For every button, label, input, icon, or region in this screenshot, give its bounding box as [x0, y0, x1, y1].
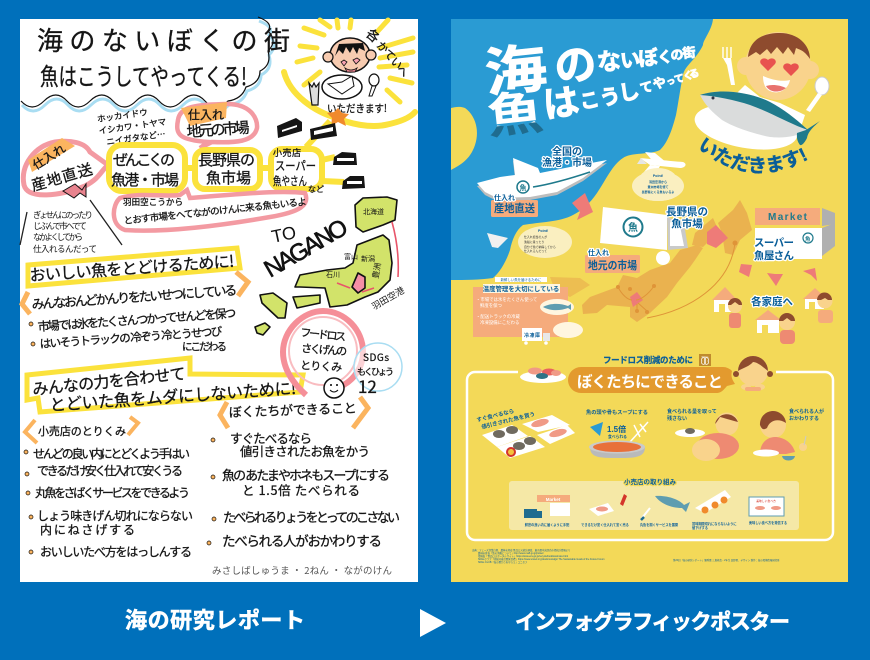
item: fresh delivery: 鮮度の良い内に届くように手配	[525, 522, 570, 527]
panel: retailer initiatives	[509, 477, 799, 530]
caption: ocean research report: 海の研究レポート	[125, 608, 305, 633]
arrow	[420, 609, 446, 637]
footer: sources: 出典：フェーズ漁業白書、農林水産省 食品ロス統計調査、東京都中央卸売市場統計情報より	[472, 548, 571, 552]
tag: local market: 仕入れ	[588, 248, 609, 257]
house 1	[712, 287, 737, 312]
text: to each home: い	[387, 54, 406, 73]
column: take only what you can eat: 食べられる量を取って	[667, 408, 717, 415]
icon: sdg 12: SDGs	[702, 355, 709, 359]
circle: food loss initiative: とりくみ	[300, 357, 343, 375]
list: what we can do: 値引きされたお魚をかう	[240, 441, 370, 460]
yellow box: fishing ports and markets	[109, 145, 195, 191]
footer: sources	[472, 548, 780, 564]
list: what we can do: たべられるりょうをとってのこさない	[223, 507, 400, 526]
footer: sources: 第20回「海の研究レポート」優秀賞 三島柊真・2年生 長野県、デザイン 制作：海の環境情報研究所	[673, 558, 780, 562]
item: discount stickers: 賞味期限切れにならないように	[692, 521, 737, 526]
panel: infographic poster	[451, 19, 848, 582]
icon: star	[327, 108, 349, 126]
title: poster: て	[673, 73, 685, 86]
footer: sources: SDGsクラブ「持続可能な開発目標」https://www.unicef.or.jp/kodomo/sdgs/ The Sustainable Goals of the Future Forum	[478, 557, 604, 561]
note: on fishing boats: なかよくしてから	[33, 231, 83, 243]
yellow box: retailers	[271, 121, 344, 195]
tag: local market	[585, 248, 640, 273]
note: prefectures: イシカワ・トヤマ	[98, 116, 167, 137]
tag: direct from origin	[491, 193, 538, 217]
note: lines	[20, 200, 122, 245]
column: take only what you can eat: 残さない	[667, 415, 687, 422]
label: each household: 各家庭へ	[751, 295, 793, 308]
note: prefectures	[96, 104, 169, 149]
bubble: point sea: Point!	[538, 229, 548, 233]
footer: sources: 農林水産省「魚の消費について」http://www.maff.go.jp/j/tokei/	[478, 551, 544, 555]
footer: sources: SDGs CLUB「海の豊かさを守ろう」ユニセフ	[478, 560, 528, 564]
map: japan sketch: 豊洲	[370, 262, 384, 280]
title: poster: ぼ	[637, 46, 659, 71]
note: prefectures: ニイガタなど…	[106, 128, 166, 148]
title: handwritten: 海のないぼくの街	[37, 21, 290, 58]
item: recipes: 美味しい食べ方を発信する	[749, 520, 787, 525]
label: nagano market: 長野県の	[666, 205, 708, 218]
title: poster: く	[682, 69, 694, 83]
icon: boy with fish plate	[691, 32, 829, 157]
list: what we can do: と 1.5倍 たべられる	[242, 480, 360, 499]
label: nationwide ports: 漁港・市場	[542, 156, 592, 169]
note: on fishing boats	[33, 209, 97, 255]
map: japan sketch: 富山	[344, 252, 358, 262]
text: to each home: へ	[393, 62, 412, 81]
note: prefectures: ホッカイドウ	[96, 106, 149, 125]
text: itadakimasu: いただきます!	[700, 137, 808, 174]
pink bubble: direct from origin: 産地直送	[29, 158, 95, 196]
icon: fish market building	[600, 207, 688, 265]
title: poster: て	[639, 79, 654, 96]
icon: supermarket	[755, 208, 835, 259]
title: poster: る	[688, 67, 700, 81]
bubble: point: 豊洲市場を経て	[647, 184, 669, 189]
heading: retailers: 小売店のとりくみ	[38, 423, 126, 439]
bubble: point sea	[518, 226, 572, 258]
yellow box: nagano fish market: 長野県の	[198, 149, 255, 170]
panel: temperature control: 冷凍設備にこだわる	[480, 319, 519, 326]
title: handwritten	[37, 21, 290, 92]
map: japan sketch: 新潟	[361, 254, 375, 264]
icon: freezer truck	[522, 328, 550, 345]
yellow box: nagano fish market	[195, 149, 272, 189]
item: recipes: 美味しい食べ方	[756, 499, 776, 503]
map: japan sketch: 石川	[326, 270, 340, 280]
list: retailer actions	[24, 445, 193, 560]
icon: ship	[477, 158, 607, 201]
circle: food loss initiative: さくげんの	[301, 340, 348, 359]
pink bubble: direct from origin: 仕入れ	[29, 140, 69, 173]
yellow box: retailers: スーパー	[275, 157, 316, 174]
title: poster: の	[670, 47, 684, 63]
heading: for reducing food loss: フードロス削減のために	[603, 355, 693, 365]
list: retailer actions: しょう味きげん切れにならない	[37, 507, 193, 524]
bubble: point sea: 自分で漁で納得してから	[524, 244, 556, 249]
icon: plane	[637, 152, 686, 175]
icons: shops	[277, 118, 365, 189]
column: second helpings	[753, 408, 824, 460]
bubble: point	[632, 168, 684, 201]
column: fish soup: 魚の頭や骨もスープにする	[586, 408, 648, 416]
map: japan sketch: 羽田空港	[369, 283, 407, 313]
item: fish filleting service: 丸魚を捌くサービスを展開	[640, 522, 678, 527]
title: poster: な	[596, 48, 622, 77]
icon: sketch fish	[63, 184, 86, 198]
pink bubble: via haneda: とおす市場をへてながのけんに来る魚もいるよ	[123, 194, 307, 227]
heading: retailers	[25, 417, 138, 443]
text: to each home	[362, 24, 412, 81]
label: nagano market	[666, 205, 708, 230]
item: discount stickers: 値下げする	[692, 525, 708, 530]
tag: direct from origin: 産地直送	[494, 201, 535, 215]
tag: direct from origin: 仕入れ	[494, 193, 515, 202]
pink bubble: local market	[177, 102, 257, 148]
note: on fishing boats: 仕入れるんだって	[33, 243, 97, 255]
bubble: point: Point!	[653, 174, 663, 178]
child 1	[728, 298, 742, 328]
heading: what we can do: ぼくたちができること	[228, 398, 357, 421]
house 2	[755, 310, 781, 333]
circle: food loss initiative: フードロス	[300, 324, 347, 345]
label: supermarket: 魚屋さん	[754, 249, 794, 262]
icon: supermarket: 魚	[805, 235, 811, 243]
sun rays	[284, 20, 415, 126]
text: to nagano: TO	[270, 222, 298, 247]
panel: temperature control	[473, 277, 574, 337]
frame: what we can do	[467, 372, 833, 540]
panel: temperature control: 新鮮しい魚を届けるために	[501, 277, 542, 282]
tag: local market: 地元の市場	[588, 258, 637, 272]
list: retailer actions: 内にねさげする	[40, 521, 135, 538]
pink bubble: local market: 地元の市場	[186, 117, 250, 142]
list: retailer actions: せんどの良い内にとどくよう手はい	[33, 445, 190, 462]
list: what we can do: たべられる人がおかわりする	[222, 530, 382, 550]
footer: sources: 環境省「食品ロスポータルサイト」https://www.env.go.jp/recycle/foodloss/index.html	[478, 554, 568, 558]
bubble: truck note	[553, 322, 583, 338]
title: poster: や	[652, 75, 667, 92]
panel: temperature control: 鮮度を保つ	[480, 302, 502, 309]
column: discounted fish	[476, 402, 575, 458]
text block: temperature control: 市場では氷をたくさんつかってせんどを保つ	[37, 304, 237, 335]
speech pill	[568, 367, 735, 393]
column: fish soup: 1.5倍	[607, 424, 626, 434]
icon: ship: 魚	[520, 183, 526, 192]
child 2	[779, 313, 795, 344]
icon: supermarket: Market	[768, 212, 808, 223]
column: discounted fish: 値引きされた魚を買う	[481, 410, 536, 431]
list: retailer actions: おいしいたべ方をはっしんする	[40, 543, 192, 560]
note: on fishing boats: ぎょせんにのったり	[33, 209, 93, 221]
panel: temperature control: 温度管理を大切にしている	[483, 284, 559, 293]
note: on fishing boats: じぶんで市へでて	[33, 220, 87, 232]
heading: reduce waste	[27, 358, 303, 416]
map: japan	[550, 200, 752, 322]
title: poster: こ	[578, 89, 602, 114]
yellow box: retailers: 魚やさん	[273, 173, 307, 189]
text: to nagano: NAGANO	[260, 214, 353, 283]
map: japan sketch: 北海道	[363, 207, 384, 217]
list: retailer actions: できるだけ安く仕入れて安くうる	[37, 462, 183, 479]
map routes	[616, 240, 738, 318]
yellow box: retailers: 小売店	[273, 146, 301, 159]
bubble: point sea: 漁船に乗ったり	[524, 239, 544, 244]
circle: sdgs goal 12: もくひょう	[357, 365, 394, 378]
column: fish soup: 食べられる	[608, 434, 627, 439]
panel: handwritten report	[20, 17, 418, 582]
bubble: point sea: 仕入れるんだって	[524, 248, 547, 253]
column: take only what you can eat	[667, 408, 739, 461]
column: discounted fish: すぐ食べるなら	[476, 407, 515, 424]
icon: fish market building: 魚	[628, 221, 638, 234]
title: poster: う	[598, 85, 623, 111]
sea	[451, 19, 713, 280]
chevrons	[22, 272, 248, 314]
text: to each home: か	[373, 38, 392, 57]
author line: みさしばしゅうま ・ 2ねん ・ ながのけん	[212, 563, 392, 577]
text block: temperature control: みんなおんどかんりをたいせつにしている	[31, 280, 238, 313]
item: cheap purchase	[581, 494, 629, 527]
circle: food loss initiative	[283, 311, 363, 395]
pink bubble: via haneda: 羽田空こうから	[123, 196, 183, 208]
caption: infographic poster: インフォグラフィックポスター	[515, 610, 790, 634]
title cloud	[21, 17, 274, 111]
fish on sea	[487, 233, 508, 248]
label: nationwide ports	[542, 145, 592, 169]
child 3	[817, 293, 833, 323]
title: poster: 海	[482, 39, 550, 104]
title: poster: く	[657, 49, 673, 67]
house 3	[803, 288, 827, 309]
list: what we can do: すぐたべるなら	[230, 428, 312, 447]
label: supermarket	[754, 237, 794, 262]
yellow box: nagano fish market: 魚市場	[206, 167, 251, 188]
item: fresh delivery	[524, 495, 570, 527]
label: supermarket: スーパー	[754, 237, 794, 249]
title: handwritten: 魚はこうしてやってくる!	[40, 57, 247, 92]
text block: temperature control: にこだわる	[182, 339, 227, 354]
column: fish soup	[586, 408, 648, 458]
bubble: point: 羽田空港から	[649, 179, 667, 184]
heading: 小売店の取り組み	[624, 477, 676, 486]
item: recipes	[749, 497, 787, 525]
list: what we can do: 魚の あたまやホネもスープにする	[222, 465, 390, 484]
title: poster: っ	[665, 75, 676, 87]
title: poster: の	[552, 40, 599, 91]
title: poster: し	[617, 80, 642, 106]
text block: temperature control	[29, 280, 238, 354]
bubble: point sea: 仕入れ担当の人が	[524, 234, 547, 239]
heading: reduce waste: とどいた魚をムダにしないために!	[49, 375, 297, 416]
yellow box: fishing ports and markets: 魚港・市場	[111, 169, 179, 190]
heading: reduce waste: みんなの力を合わせて	[31, 360, 187, 400]
list: retailer actions: 丸魚をさばくサービスをできるよう	[35, 484, 190, 501]
circle: sdgs goal 12: SDGs	[363, 349, 389, 364]
heading: deliver tasty fish: おいしい魚をとどけるために!	[29, 248, 235, 286]
title: poster: は	[540, 80, 582, 126]
text block: temperature control: はいそうトラックの 冷ぞう 冷とうせつび	[39, 323, 223, 352]
text: to each home: て	[380, 46, 399, 65]
icon: freezer truck: 冷凍庫	[524, 332, 540, 339]
yellow box: fishing ports and markets: ぜんこくの	[113, 149, 175, 170]
map: japan sketch	[255, 197, 407, 335]
speech pill: ぼくたちにできること	[577, 373, 723, 391]
icon: sdg 12	[699, 354, 711, 366]
item: cheap purchase: できるだけ安く仕入れて安く売る	[581, 522, 629, 527]
panel: temperature control: ・配送トラックの冷蔵	[476, 313, 521, 320]
item: discount stickers	[692, 490, 737, 530]
circle: sdgs goal 12: 12	[358, 373, 377, 398]
yellow box: retailers: など	[308, 184, 324, 195]
icon: smiley	[324, 378, 344, 398]
label: nagano market: 魚市場	[671, 217, 703, 230]
item: fresh delivery: Market	[546, 497, 561, 502]
label: nationwide ports: 全国の	[552, 145, 582, 158]
icon: boy eating	[309, 38, 379, 105]
column: second helpings: 食べられる人が	[789, 408, 824, 415]
title: poster: 街	[682, 45, 696, 61]
column: second helpings: おかわりする	[789, 415, 819, 422]
bubble: point: 長野県にくる魚もいるよ	[642, 189, 674, 194]
list: what we can do	[207, 428, 400, 550]
arrows: pink	[572, 193, 817, 286]
title: poster	[482, 39, 700, 145]
text: itadakimasu: いただきます!	[327, 101, 387, 116]
circle: sdgs goal 12	[354, 343, 402, 398]
panel: temperature control: ・市場では氷をたくさん使って	[476, 296, 537, 303]
title: poster: い	[619, 49, 641, 73]
pink bubble: local market: 仕入れ	[188, 106, 224, 123]
pink bubble: direct from origin	[23, 138, 108, 196]
icon: sushi plate	[520, 368, 566, 383]
item: fish filleting service	[640, 496, 690, 527]
title: poster: 魚	[485, 86, 546, 145]
heading: what we can do	[220, 397, 368, 428]
icon: girl	[733, 356, 773, 391]
text: to each home: 各	[362, 24, 385, 46]
